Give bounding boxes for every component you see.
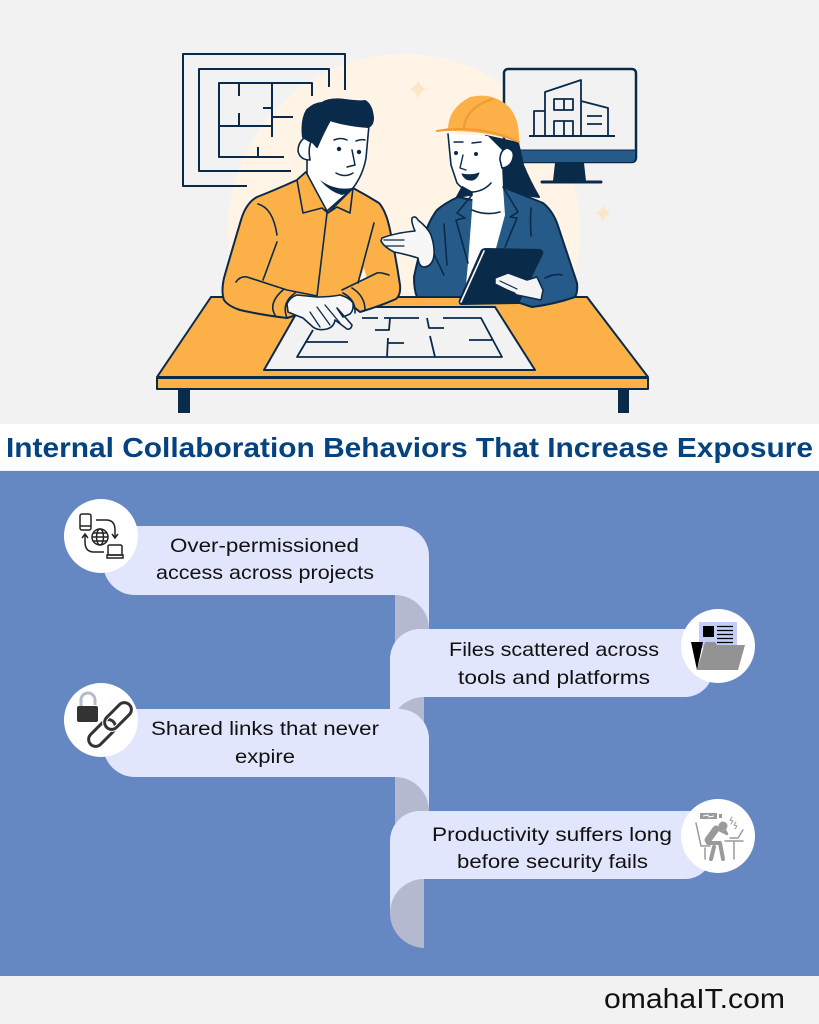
text: over-permissioned: Over-permissioned xyxy=(170,535,359,557)
collar xyxy=(297,172,353,213)
text: shared links: expire xyxy=(235,746,295,768)
shirt seams xyxy=(236,204,389,318)
text: files scattered: Files scattered across xyxy=(449,639,659,661)
illustration: two colleagues reviewing a floor plan xyxy=(157,54,648,413)
text: over-permissioned xyxy=(156,535,374,584)
wall floor plan xyxy=(183,54,345,186)
blue panel xyxy=(0,471,819,976)
back hair xyxy=(486,136,539,197)
text: productivity: Productivity suffers long xyxy=(432,824,672,846)
cream background circle xyxy=(228,54,580,300)
jacket xyxy=(414,187,577,307)
title band xyxy=(0,424,819,470)
text: productivity xyxy=(432,824,672,873)
icon: open lock and chain link xyxy=(64,683,138,757)
title: Internal Collaboration Behaviors That Increase Exposure xyxy=(6,432,813,463)
icon: devices and globe xyxy=(64,499,138,573)
table legs xyxy=(178,390,629,413)
lapels xyxy=(433,187,562,278)
footer: website: omahaIT.com xyxy=(604,983,785,1014)
neck and face xyxy=(307,118,369,211)
hand xyxy=(287,295,353,330)
icon: stressed worker at desk xyxy=(681,799,755,873)
hand on tablet xyxy=(495,273,543,300)
text: files scattered: tools and platforms xyxy=(458,667,650,689)
ear xyxy=(298,138,311,160)
pointing hand xyxy=(381,217,434,267)
ribbon 4 xyxy=(390,811,713,948)
ribbon timeline xyxy=(100,526,713,948)
text: files scattered xyxy=(449,639,659,689)
table top xyxy=(157,297,648,377)
monitor with building xyxy=(504,69,636,182)
text: shared links: Shared links that never xyxy=(151,718,380,740)
ribbon 1 xyxy=(100,526,429,660)
man xyxy=(222,99,400,330)
shirt xyxy=(222,172,400,318)
white top and neck xyxy=(466,165,505,285)
sparkle left xyxy=(409,79,427,100)
sleeve gap xyxy=(359,268,367,281)
icon: open folder with document xyxy=(681,609,755,683)
jaw shadow xyxy=(320,180,352,195)
ribbon 2 xyxy=(390,629,713,750)
face xyxy=(448,134,502,192)
text: productivity: before security fails xyxy=(457,851,648,873)
ribbon 3 xyxy=(100,709,429,840)
woman xyxy=(381,96,577,307)
table front edge xyxy=(157,378,648,389)
hair xyxy=(302,99,373,147)
hard hat xyxy=(437,96,519,143)
text: shared links xyxy=(151,718,380,768)
text: over-permissioned: access across projects xyxy=(156,562,374,584)
sparkle right xyxy=(595,204,611,223)
paper plan on table xyxy=(264,307,535,370)
tablet xyxy=(460,249,542,304)
